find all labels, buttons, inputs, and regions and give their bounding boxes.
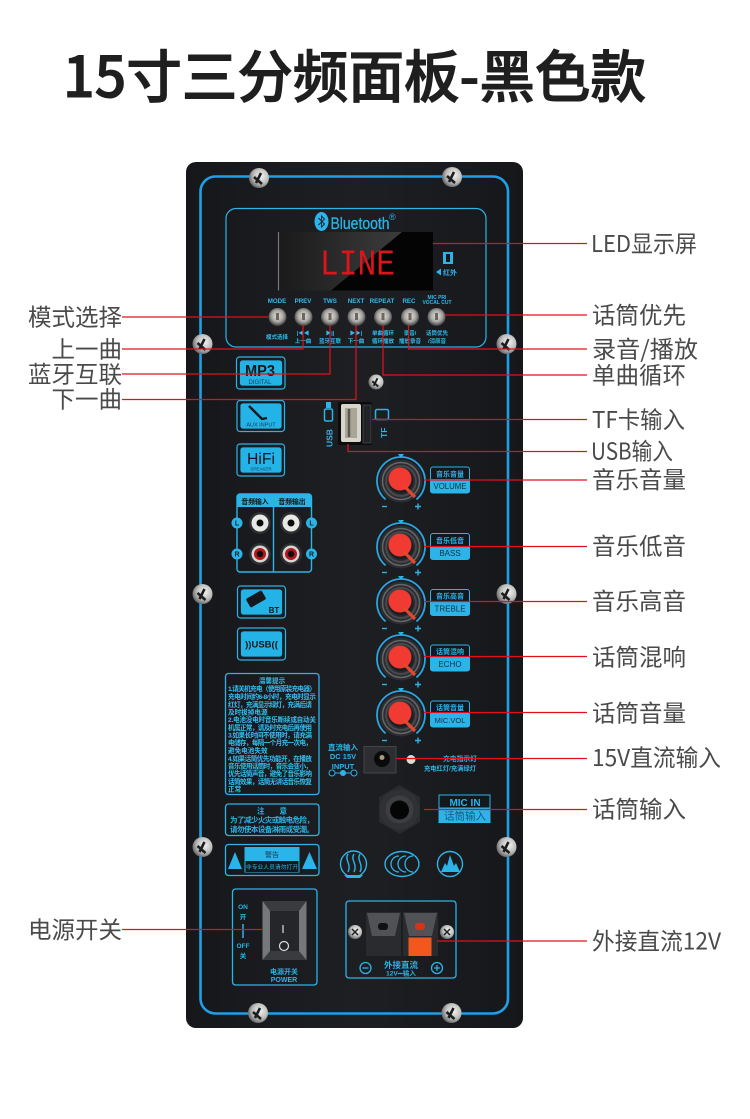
title: 15寸三分频面板-黑色款 <box>63 32 646 114</box>
left callout labels: 模式选择 <box>28 298 122 332</box>
panel: audio RCA input output: 音频输入 <box>241 497 269 506</box>
knob: mic volume: MIC.VOL <box>435 716 465 725</box>
button labels top: MIC PRI <box>428 295 447 301</box>
MIC IN label <box>438 794 490 823</box>
knob: music treble <box>377 576 470 632</box>
DC 15V input label: DC 15V <box>330 752 356 761</box>
panel: speaker amplifier board <box>186 162 523 1028</box>
right callout labels: 录音/播放 <box>592 330 698 364</box>
knob: music bass <box>377 520 470 576</box>
LED display: LINE <box>320 244 395 286</box>
left callout labels: 下一曲 <box>52 380 122 414</box>
left callout labels: 电源开关 <box>28 911 122 945</box>
USB and TF port <box>324 402 389 447</box>
badge: AUX input: AUX INPUT <box>246 422 276 428</box>
button labels bottom <box>266 329 448 345</box>
charge indicator light <box>406 754 477 772</box>
button labels bottom: 循环播放 <box>372 337 394 345</box>
DC 15V input label: 直流输入 <box>328 742 358 752</box>
power switch panel: 关 <box>240 951 247 960</box>
badge: MP3 digital: DIGITAL <box>249 380 272 386</box>
panel: audio RCA input output: L <box>235 520 240 528</box>
MIC IN label: 话筒输入 <box>444 810 486 822</box>
right callout labels: 单曲循环 <box>592 356 686 390</box>
power switch panel: 电源开关 <box>270 967 298 976</box>
badge: USB: ))USB(( <box>245 640 279 650</box>
knob: music bass: 音乐低音 <box>436 536 464 545</box>
right callout labels: 话筒优先 <box>592 296 686 330</box>
badge: USB <box>238 628 286 660</box>
knob: music volume <box>377 454 470 510</box>
external 12V terminal panel: 12V⎓输入 <box>386 968 416 978</box>
charge indicator light: 充电指示灯 <box>443 754 477 763</box>
knob: music volume: VOLUME <box>434 482 466 491</box>
left callout labels <box>28 298 122 945</box>
USB and TF port: USB <box>324 429 334 447</box>
external 12V terminal panel: 外接直流 <box>384 960 418 970</box>
button labels bottom: 蓝牙互联 <box>319 337 341 345</box>
notice: usage tips: 避免电池失效 <box>228 746 268 755</box>
certification icons <box>340 851 462 878</box>
button labels top: TWS <box>323 298 337 305</box>
panel: audio RCA input output: L <box>309 520 314 528</box>
notice: usage tips: 及时拔掉电源 <box>228 708 268 716</box>
notice: usage tips: 机属正常，请及时充电后再使用 <box>228 723 312 732</box>
right callout labels <box>591 225 721 956</box>
knob: music treble: 音乐高音 <box>436 592 464 600</box>
button labels bottom: ▶|| <box>326 330 335 337</box>
notice: usage tips: 电储存，每隔一个月充一次电， <box>228 738 312 747</box>
charge indicator light: 充电红灯/充满绿灯 <box>424 764 477 772</box>
right callout labels: 音乐高音 <box>592 582 686 616</box>
microphone jack <box>379 785 420 834</box>
notice: usage tips: 3.如果长时间不使用时，请充满 <box>228 730 312 740</box>
bluetooth logo <box>314 212 396 233</box>
panel: bluetooth display section <box>226 208 486 347</box>
notice: caution: 为了减少火灾或触电危险， <box>230 814 314 824</box>
button labels top: REPEAT <box>370 298 395 305</box>
notice: usage tips: 温馨提示 <box>259 676 286 685</box>
notice: caution: 请勿使本设备淋雨或受潮。 <box>230 824 314 834</box>
button labels bottom: 上一曲 <box>295 337 312 345</box>
notice: usage tips: 红灯，充满显示绿灯，充满后请 <box>228 700 312 709</box>
button labels bottom: 播放录音 <box>399 337 421 345</box>
button labels bottom: ▶▶| <box>350 330 363 337</box>
button labels bottom: 模式选择 <box>266 333 288 341</box>
panel: audio RCA input output <box>232 494 317 572</box>
button labels bottom: 下一曲 <box>348 337 365 345</box>
infrared receiver label: 红外 <box>443 268 457 277</box>
notice: warning with triangles: 警告 <box>265 850 279 859</box>
panel: audio RCA input output: 音频输出 <box>278 497 306 506</box>
notice: usage tips: 话筒效果，话筒无讲话音乐恢复 <box>228 777 312 786</box>
right callout labels: 15V直流输入 <box>592 739 721 773</box>
notice: usage tips: 充电时间约6-8小时，充电时显示 <box>228 692 316 701</box>
knob: mic volume <box>377 688 470 744</box>
badge: BT <box>238 586 286 618</box>
notice: caution: 注 意 <box>257 806 287 816</box>
callout lines <box>122 244 587 941</box>
badge: MP3 digital <box>236 357 285 389</box>
button labels bottom: 录音/ <box>404 329 417 337</box>
knob: mic echo: ECHO <box>438 660 462 669</box>
DC 15V input label <box>328 742 358 776</box>
right callout labels: TF卡输入 <box>592 401 685 435</box>
button labels top: NEXT <box>348 298 364 305</box>
right callout labels: 外接直流12V <box>592 922 721 956</box>
bluetooth logo: Bluetooth <box>330 214 390 233</box>
button labels bottom: 单曲循环 <box>372 329 394 337</box>
button labels bottom: 话筒优先 <box>426 329 448 337</box>
notice: warning with triangles: 非专业人员请勿打开 <box>246 863 298 871</box>
DC power jack <box>364 746 396 773</box>
badge: HiFi speaker: SPEAKER <box>250 466 272 472</box>
power switch panel <box>232 889 317 985</box>
notice: caution <box>226 804 319 836</box>
right callout labels: 音乐低音 <box>592 528 686 562</box>
notice: usage tips: 2.电池没电时音乐断续或自动关 <box>228 715 316 724</box>
right callout labels: LED显示屏 <box>591 225 697 259</box>
button labels bottom: /消原音 <box>428 337 447 345</box>
badge: MP3 digital: MP3 <box>245 363 275 380</box>
MIC IN label: MIC IN <box>449 798 481 809</box>
left callout labels: 上一曲 <box>52 330 122 364</box>
DC 15V input label: INPUT <box>332 762 355 771</box>
knob: music volume: 音乐音量 <box>436 470 464 478</box>
external 12V terminal panel <box>346 901 456 978</box>
right callout labels: USB输入 <box>591 432 673 466</box>
right callout labels: 音乐音量 <box>592 461 686 495</box>
knob: music bass: BASS <box>439 549 461 558</box>
panel: audio RCA input output: R <box>309 552 314 558</box>
button labels top: PREV <box>295 298 312 305</box>
power switch panel: OFF <box>236 943 250 950</box>
notice: usage tips: 正常 <box>228 784 242 794</box>
power switch panel: ON <box>238 904 248 911</box>
notice: usage tips: 优先话筒声音，避免了音乐影响 <box>228 769 312 778</box>
badge: HiFi speaker <box>237 444 284 476</box>
button labels top: MODE <box>268 298 286 305</box>
button labels top: REC <box>402 298 416 305</box>
USB and TF port: TF <box>379 428 389 438</box>
power switch panel: 开 <box>240 913 247 921</box>
notice: usage tips <box>226 674 319 794</box>
badge: BT: BT <box>269 606 279 615</box>
infrared receiver label <box>436 252 457 277</box>
right callout labels: 话筒音量 <box>592 694 686 728</box>
panel: audio RCA input output: R <box>234 552 240 558</box>
bluetooth logo: ® <box>389 212 396 222</box>
power switch panel: POWER <box>271 977 297 984</box>
knob: mic echo <box>377 632 470 688</box>
button labels top: VOCAL CUT <box>422 300 452 306</box>
knob: mic echo: 话筒混响 <box>436 647 464 656</box>
notice: usage tips: 1.请关机充电（使用原装充电器） <box>228 684 316 693</box>
LED display <box>278 232 433 290</box>
button labels bottom: |◀◀ <box>297 330 309 337</box>
button labels top <box>268 295 452 306</box>
knob: music treble: TREBLE <box>434 604 466 614</box>
badge: HiFi speaker: HiFi <box>247 451 275 468</box>
notice: usage tips: 4.如果话筒优先功能开，在播放 <box>228 754 312 763</box>
left callout labels: 蓝牙互联 <box>28 356 122 390</box>
panel screws <box>192 167 516 1023</box>
right callout labels: 话筒输入 <box>592 790 686 824</box>
mode and function buttons <box>268 308 446 326</box>
notice: warning with triangles <box>226 844 319 876</box>
badge: AUX input <box>237 400 284 432</box>
notice: usage tips: 音乐使用话筒时，音乐会变小， <box>228 762 312 770</box>
right callout labels: 话筒混响 <box>592 638 686 672</box>
knob: mic volume: 话筒音量 <box>436 703 464 712</box>
